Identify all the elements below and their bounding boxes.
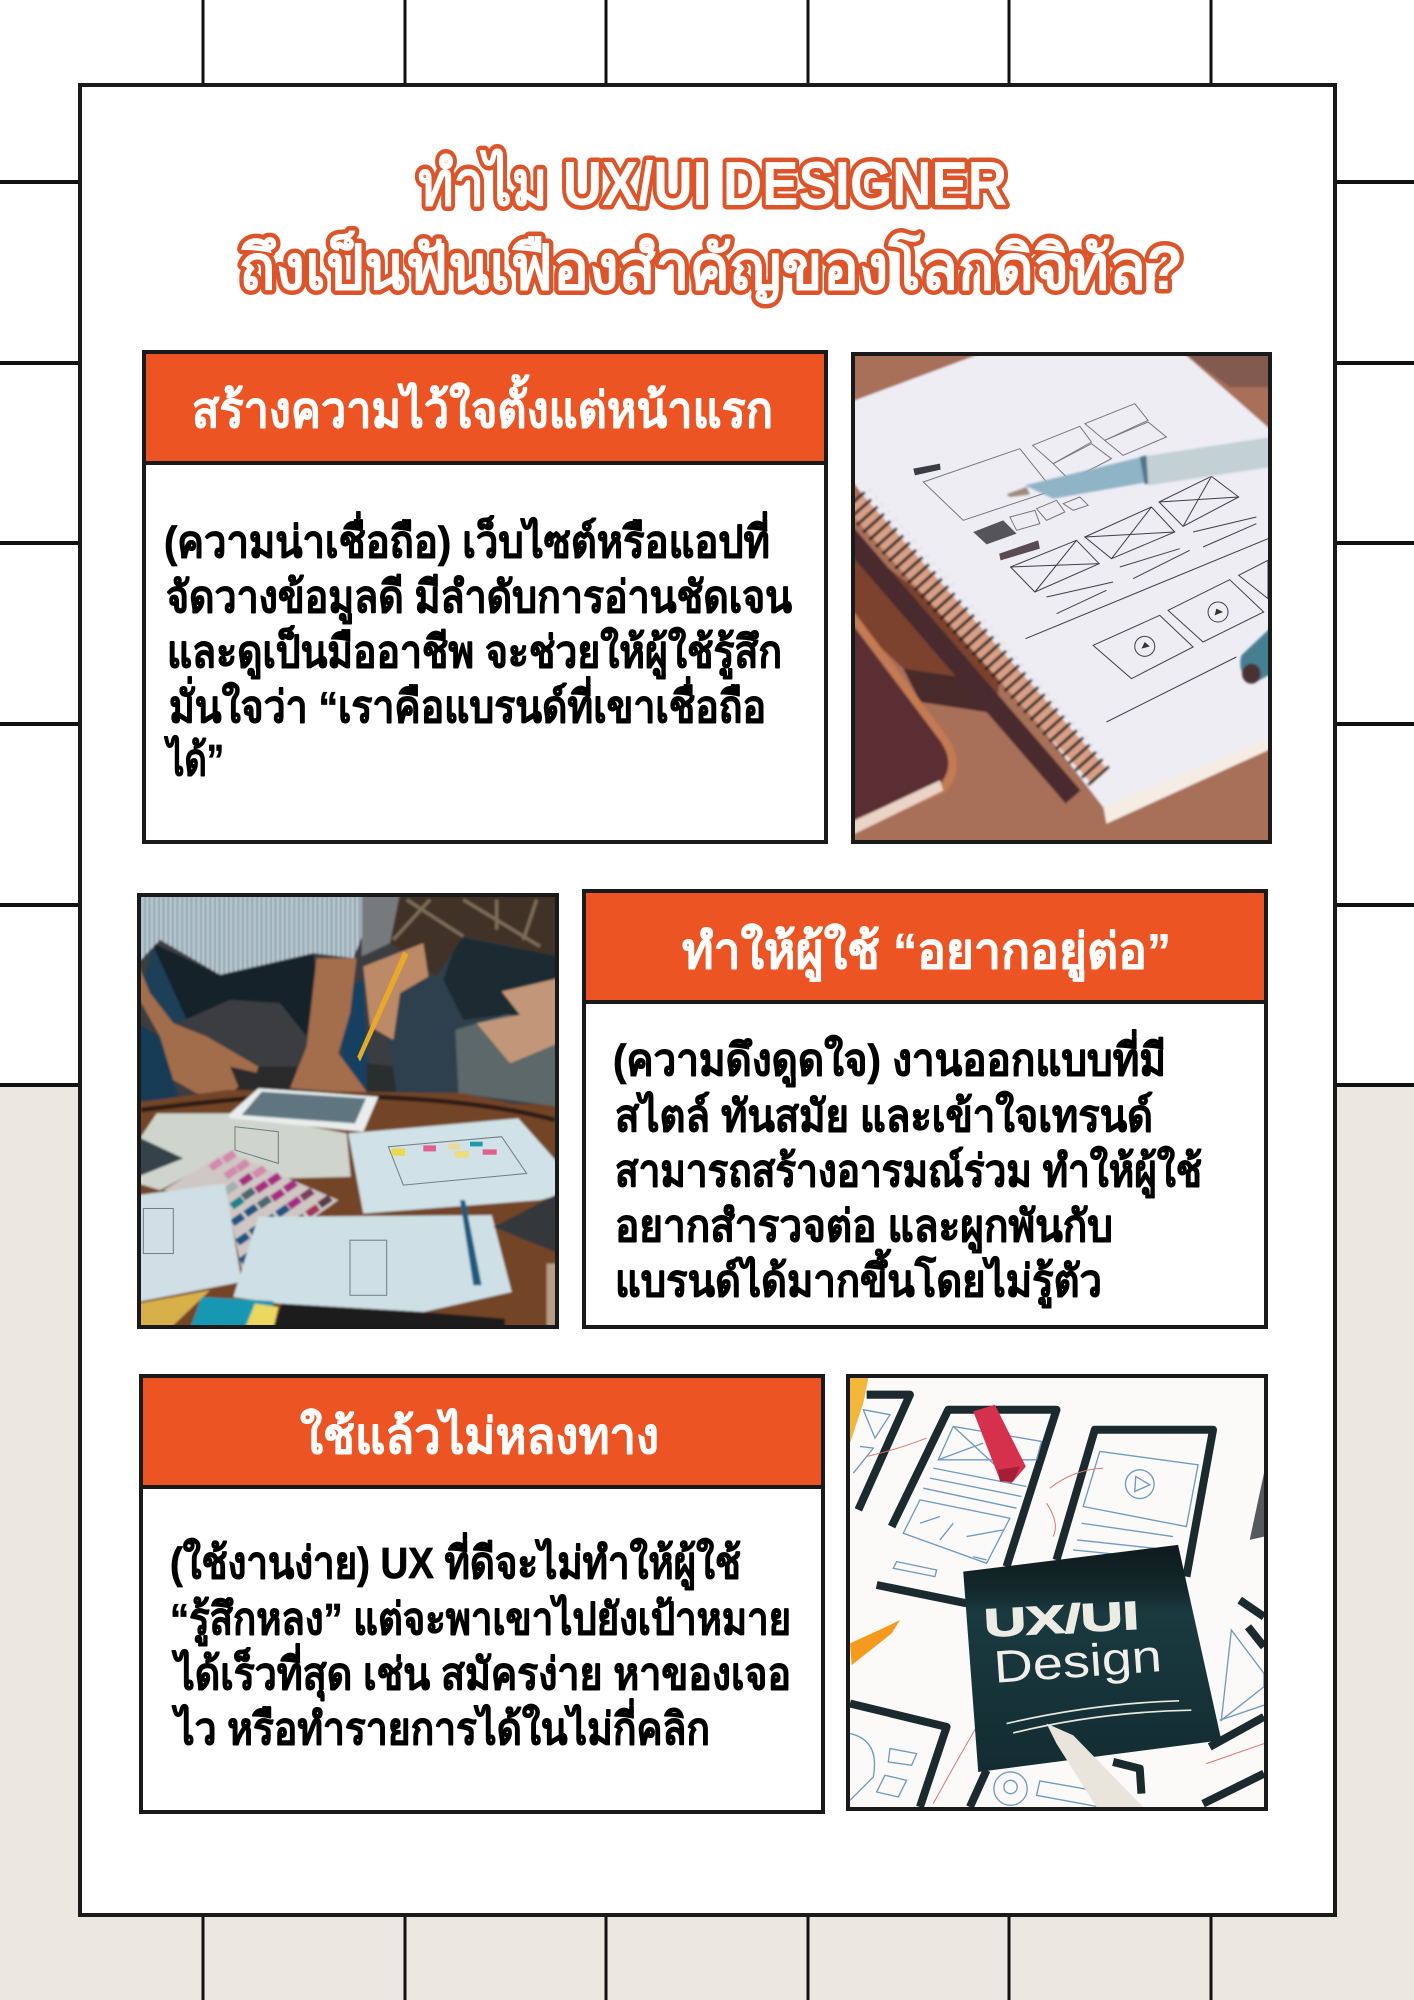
- body text: easy: [170, 1532, 791, 1754]
- panel: make users want to stay: [584, 891, 1266, 1327]
- heading bar: trust: [144, 352, 826, 463]
- photo: UX/UI Design note over wireframes: Design: [992, 1630, 1163, 1693]
- title: ถึงเป็นฟันเฟืองสำคัญของโลกดิจิทัล?: [239, 230, 1183, 304]
- body text: stay: [613, 1029, 1202, 1308]
- body text: easy: ไว หรือทำรายการได้ในไม่กี่คลิก: [171, 1698, 710, 1754]
- title: [239, 148, 1183, 304]
- body text: trust: และดูเป็นมืออาชีพ จะช่วยให้ผู้ใช้รู้สึก: [167, 625, 782, 679]
- photo: UX/UI Design note over wireframes: UX/UI: [983, 1594, 1140, 1646]
- body text: stay: สามารถสร้างอารมณ์ร่วม ทำให้ผู้ใช้: [615, 1145, 1202, 1198]
- body text: stay: (ความดึงดูดใจ) งานออกแบบที่มี: [613, 1029, 1166, 1087]
- heading bar: easy: ใช้แล้วไม่หลงทาง: [300, 1407, 659, 1464]
- heading bar: easy: [141, 1376, 823, 1487]
- body text: trust: [164, 511, 792, 785]
- body text: stay: แบรนด์ได้มากขึ้นโดยไม่รู้ตัว: [615, 1248, 1102, 1308]
- body text: stay: สไตล์ ทันสมัย และเข้าใจเทรนด์: [615, 1090, 1153, 1141]
- body text: easy: “รู้สึกหลง” แต่จะพาเขาไปยังเป้าหมาย: [170, 1593, 791, 1646]
- panel: easy to use: [141, 1376, 823, 1812]
- photo: UX/UI Design note over wireframes: [848, 1376, 1266, 1809]
- heading bar: stay: [584, 891, 1266, 1002]
- body text: trust: มั่นใจว่า “เราคือแบรนด์ที่เขาเชื่อถือ: [169, 676, 766, 732]
- body text: stay: อยากสำรวจต่อ และผูกพันกับ: [615, 1202, 1113, 1253]
- photo: notebook with wireframes: [840, 353, 1271, 843]
- heading bar: trust: สร้างความไว้ใจตั้งแต่หน้าแรก: [192, 374, 773, 438]
- heading bar: stay: ทำให้ผู้ใช้ “อยากอยู่ต่อ”: [682, 923, 1171, 982]
- title: ทำไม UX/UI DESIGNER: [418, 148, 1007, 219]
- body text: trust: จัดวางข้อมูลดี มีลำดับการอ่านชัดเจน: [166, 573, 792, 624]
- panel: trust from first page: [144, 352, 826, 842]
- body text: trust: (ความน่าเชื่อถือ) เว็บไซต์หรือแอปที่: [164, 511, 770, 567]
- body text: easy: (ใช้งานง่าย) UX ที่ดีจะไม่ทำให้ผู้ใช้: [170, 1532, 741, 1590]
- body text: easy: ได้เร็วที่สุด เช่น สมัครง่าย หาของเจอ: [171, 1643, 791, 1702]
- photo: team reviewing color swatches and tablet: [138, 894, 558, 1328]
- body text: trust: ได้”: [164, 734, 224, 785]
